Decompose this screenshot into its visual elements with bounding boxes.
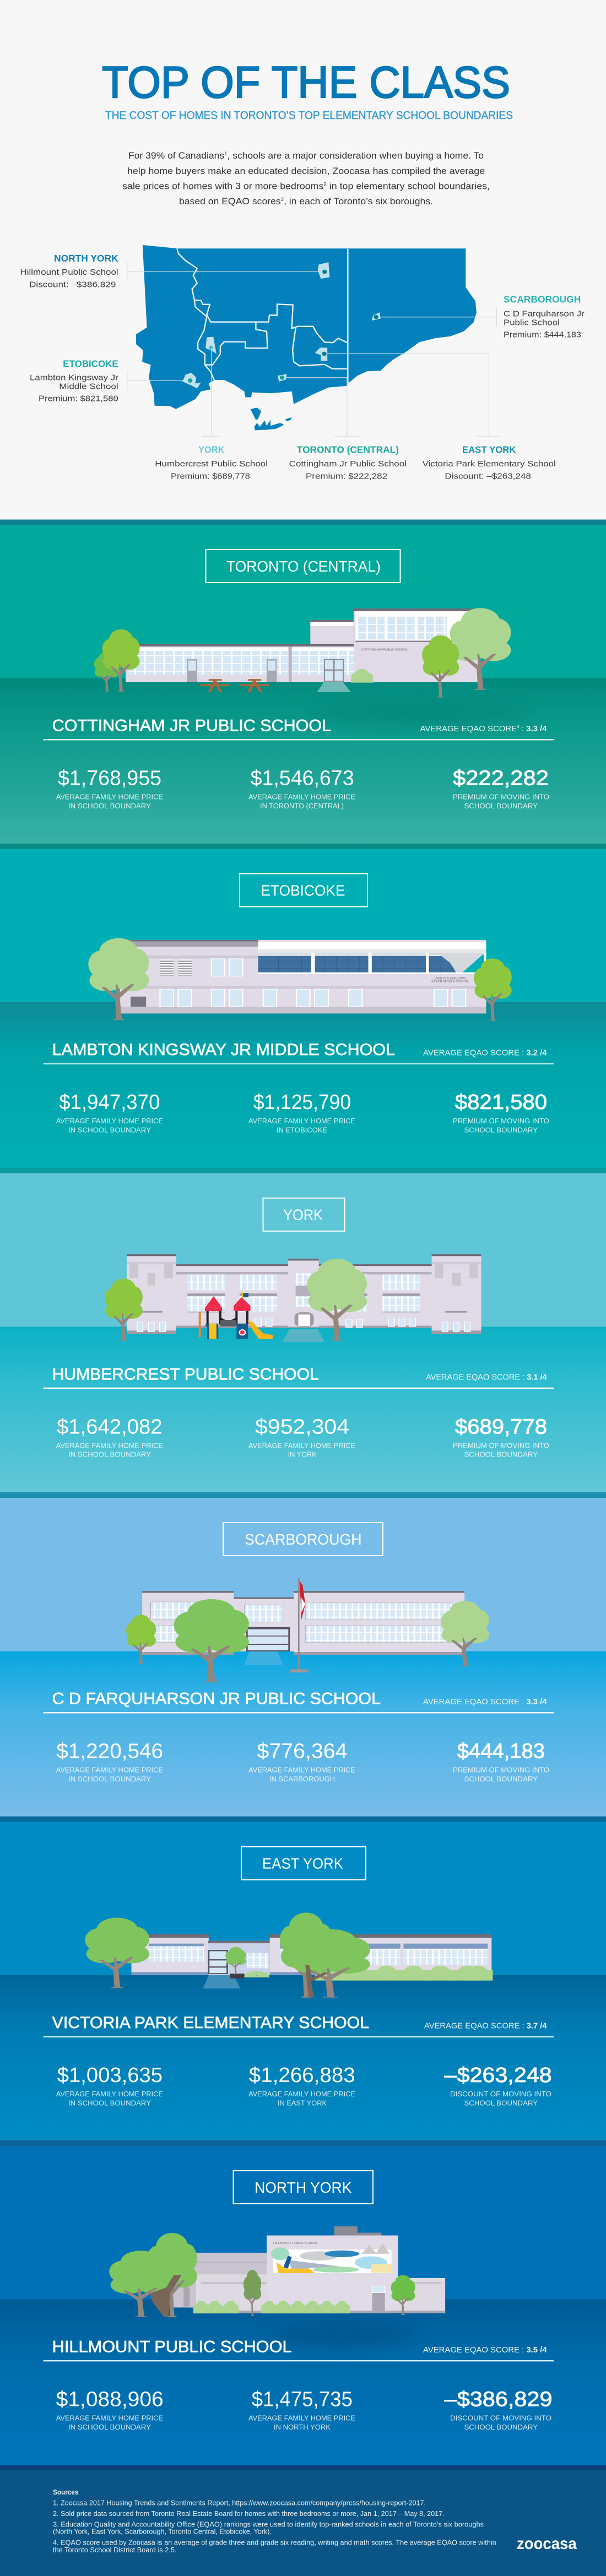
stat: price in school boundary: IN SCHOOL BOUNDARY [68,2423,151,2431]
sources: 1. Zoocasa 2017 Housing Trends and Sentiments Report, https://www.zoocasa.com/company/press/housing-report-2017. [53,2499,426,2507]
callout: Scarborough [504,294,585,339]
stat: price in borough [248,2388,355,2431]
school heading: HILLMOUNT PUBLIC SCHOOL [52,2338,292,2356]
borough label: SCARBOROUGH [245,1531,362,1548]
stat: premium: PREMIUM OF MOVING INTO [453,1766,549,1774]
sign: school name on building: LAMBTON KINGSWAY [434,977,467,980]
illustration: Hillmount school [109,2226,445,2317]
stat: price in school boundary [56,1091,163,1134]
intro text: help home buyers make an educated decision, Zoocasa has compiled the average [127,166,485,176]
stat: premium [453,767,549,810]
stat: price in school boundary [56,2388,164,2431]
stat: price in school boundary: AVERAGE FAMILY HOME PRICE [56,2090,163,2098]
stat: price in school boundary: IN SCHOOL BOUNDARY [68,2099,151,2107]
stat: price in school boundary: $1,642,082 [57,1415,163,1438]
borough label [263,1198,345,1231]
callout: Toronto Central: Cottingham Jr Public School [289,459,407,469]
callout: Scarborough: Public School [504,318,560,327]
stat: premium: SCHOOL BOUNDARY [464,1450,538,1459]
stat: price in school boundary [56,767,163,810]
stat: price in borough: $1,266,883 [249,2064,355,2087]
stat: price in borough: $952,304 [255,1415,349,1438]
stat: price in school boundary: AVERAGE FAMILY HOME PRICE [56,793,163,801]
panel: Etobicoke [0,844,606,1168]
map of Toronto boroughs [127,245,501,436]
stat: premium: $689,778 [455,1415,547,1438]
intro text: , schools are a major consideration when buying a home. To [227,151,484,161]
illustration: C D Farquharson school [126,1578,489,1682]
callout: North York: NORTH YORK [54,253,118,264]
callout: Toronto Central: TORONTO (CENTRAL) [297,444,399,455]
stat: price in borough: AVERAGE FAMILY HOME PRICE [248,1117,355,1125]
stat: discount: DISCOUNT OF MOVING INTO [450,2414,551,2422]
stat: price in borough: AVERAGE FAMILY HOME PRICE [248,1441,355,1449]
sign: school name on building [431,977,469,983]
illustration: Lambton Kingsway school [88,938,512,1020]
title: TOP OF THE CLASS [102,58,510,107]
stat: discount: –$386,829 [445,2388,552,2411]
sources: 2. Sold price data sourced from Toronto Real Estate Board for homes with three bedrooms or more, Jan 1, 2017 – May 8, 2017. [53,2510,445,2518]
school heading: VICTORIA PARK ELEMENTARY SCHOOL [52,2014,369,2032]
sign: school name on building: COTTINGHAM PUBLIC SCHOOL [361,649,408,652]
callout: Etobicoke [30,358,118,404]
borough label: YORK [283,1207,323,1224]
callout: Scarborough: SCARBOROUGH [504,294,581,305]
callout: North York: Hillmount Public School [20,268,118,277]
stat: price in borough: AVERAGE FAMILY HOME PRICE [248,2090,355,2098]
stat: price in borough: IN NORTH YORK [274,2423,331,2431]
school heading: LAMBTON KINGSWAY JR MIDDLE SCHOOL [52,1041,395,1059]
stat: price in school boundary: $1,768,955 [58,767,161,790]
sources: the Toronto School District Board is 2.5. [53,2546,177,2554]
EAQO score: : [520,725,526,733]
borough label: NORTH YORK [255,2179,352,2196]
stat: price in borough [248,1415,355,1459]
stat: price in school boundary: IN SCHOOL BOUNDARY [68,1126,151,1134]
subtitle: THE COST OF HOMES IN TORONTO’S TOP ELEMENTARY SCHOOL BOUNDARIES [105,110,513,122]
school boundary markers [182,262,381,388]
EAQO score: AVERAGE EQAO SCORE [420,725,514,733]
sign: school name on building: HILLMOUNT PUBLIC SCHOOL [273,2242,318,2245]
EAQO score: AVERAGE EQAO SCORE : 3.2 /4 [423,1048,547,1057]
EAQO score: AVERAGE EQAO SCORE : 3.7 /4 [424,2022,547,2031]
stat: discount: SCHOOL BOUNDARY [464,2423,538,2431]
intro text [122,151,490,206]
illustration: Victoria Park school [85,1912,493,1998]
intro text: , in each of Toronto’s six boroughs. [284,197,433,206]
panel: Toronto (Central) [0,520,606,844]
sources: (North York, East York, Scarborough, Toronto Central, Etobicoke, York). [53,2528,272,2536]
stat: price in borough [248,1091,355,1134]
illustration: Humbercrest school [105,1254,481,1342]
borough label: TORONTO (CENTRAL) [226,558,381,575]
sources: Sources [53,2488,78,2496]
callout: East York: EAST YORK [462,444,516,455]
stat: premium: PREMIUM OF MOVING INTO [453,1441,549,1449]
stat: price in school boundary: IN SCHOOL BOUNDARY [68,1775,151,1783]
EAQO score: 3.3 /4 [526,725,547,733]
stat: price in borough [248,1740,355,1783]
leader lines [127,262,501,436]
stat: price in borough: AVERAGE FAMILY HOME PRICE [248,793,355,801]
school heading: C D FARQUHARSON JR PUBLIC SCHOOL [52,1690,381,1708]
stat: price in school boundary: AVERAGE FAMILY HOME PRICE [56,1766,163,1774]
stat: price in school boundary: AVERAGE FAMILY HOME PRICE [56,2414,163,2422]
stat: price in school boundary: IN SCHOOL BOUNDARY [68,1450,151,1459]
callout: York [155,444,268,481]
intro text: 1 [224,151,227,156]
callout: Etobicoke: ETOBICOKE [63,358,118,369]
stat: price in borough: $1,546,673 [251,767,354,790]
intro text: 3 [281,197,284,202]
callout: North York: Discount: –$386,829 [29,280,116,289]
stat: price in school boundary: AVERAGE FAMILY HOME PRICE [56,1441,163,1449]
callout: Scarborough: Premium: $444,183 [504,330,581,339]
callout: Etobicoke: Premium: $821,580 [39,394,118,404]
callout: Toronto Central: Premium: $222,282 [306,471,387,481]
borough label [206,550,400,583]
EAQO score: AVERAGE EQAO SCORE : 3.3 /4 [423,1698,547,1707]
stat: price in borough: AVERAGE FAMILY HOME PRICE [248,1766,355,1774]
stat: premium: SCHOOL BOUNDARY [464,1126,538,1134]
stat: premium: $444,183 [457,1740,545,1763]
intro text: in top elementary school boundaries, [327,182,490,192]
EAQO score: AVERAGE EQAO SCORE : 3.5 /4 [423,2346,547,2355]
stat: premium: PREMIUM OF MOVING INTO [453,1117,549,1125]
borough label: ETOBICOKE [261,882,345,899]
intro text: For 39% of Canadians [128,151,219,161]
stat: price in borough [248,2064,355,2107]
stat: price in school boundary: $1,947,370 [59,1091,160,1114]
stat: price in borough [248,767,355,810]
logo: zoocasa: zoocasa [517,2535,577,2553]
school heading: HUMBERCREST PUBLIC SCHOOL [52,1365,319,1383]
borough label [234,2171,373,2204]
stat: price in borough: AVERAGE FAMILY HOME PRICE [248,2414,355,2422]
borough label: EAST YORK [262,1855,343,1872]
stat: premium: $821,580 [455,1091,547,1114]
callout: York: YORK [198,444,225,455]
stat: discount [445,2388,552,2431]
stat: price in borough: $1,475,735 [252,2388,353,2411]
stat: price in borough: IN YORK [288,1450,317,1459]
stat: price in school boundary: AVERAGE FAMILY HOME PRICE [56,1117,163,1125]
callout: Toronto Central [289,444,407,481]
stat: price in borough: IN EAST YORK [278,2099,327,2107]
EAQO score: AVERAGE EQAO SCORE : 3.1 /4 [426,1373,547,1382]
stat: price in borough: IN SCARBOROUGH [269,1775,335,1783]
stat: price in school boundary: $1,003,635 [57,2064,163,2087]
borough label [240,873,367,906]
stat: price in school boundary: IN SCHOOL BOUNDARY [68,802,151,810]
stat: price in borough: IN TORONTO (CENTRAL) [260,802,344,810]
stat: price in school boundary: $1,088,906 [56,2388,164,2411]
panel: Scarborough [0,1492,606,1817]
stat: price in school boundary: $1,220,546 [56,1740,163,1763]
callout: Etobicoke: Lambton Kingsway Jr [30,373,118,382]
illustration: playground [200,1292,273,1339]
panel: East York [0,1816,606,2141]
callout: York: Premium: $689,778 [171,471,250,481]
callout: East York [423,444,556,481]
illustration: Cottingham school [94,608,511,697]
sources: 4. EQAO score used by Zoocasa is an average of grade three and grade six reading, writing and math scores. The average EQAO score within [53,2539,496,2547]
stat: premium: $222,282 [453,767,549,790]
stat: discount: SCHOOL BOUNDARY [464,2099,538,2107]
stat: price in school boundary [56,1415,163,1459]
callout: East York: Discount: –$263,248 [445,471,531,481]
stat: premium: PREMIUM OF MOVING INTO [453,793,549,801]
sign: school name on building: JUNIOR MIDDLE SCHOOL [431,980,469,983]
stat: premium: SCHOOL BOUNDARY [464,1775,538,1783]
stat: price in school boundary [56,2064,163,2107]
stat: premium [453,1091,549,1134]
stat: discount [445,2064,552,2107]
callout: Scarborough: C D Farquharson Jr [504,309,585,318]
intro text: 2 [323,182,327,187]
stat: premium: SCHOOL BOUNDARY [464,802,538,810]
callout: North York [20,253,118,289]
callout: East York: Victoria Park Elementary School [423,459,556,469]
borough label [223,1523,383,1556]
panel: North York [0,2140,606,2465]
EAQO score [420,724,547,733]
sources: 3. Education Quality and Accountability Office (EQAO) rankings were used to identify top-ranked schools in each of Toronto’s six boroughs [53,2520,484,2528]
stat: premium [453,1740,549,1783]
stat: discount: –$263,248 [445,2064,552,2087]
stat: premium [453,1415,549,1459]
illustration: mural [271,2243,392,2273]
intro text: sale prices of homes with 3 or more bedrooms [122,182,309,192]
panel: York [0,1168,606,1492]
school heading: COTTINGHAM JR PUBLIC SCHOOL [52,717,331,735]
callout: Etobicoke: Middle School [59,382,118,391]
intro text: based on EQAO scores [179,197,274,206]
stat: discount: DISCOUNT OF MOVING INTO [450,2090,551,2098]
callout: York: Humbercrest Public School [155,459,268,469]
stat: price in borough: $776,364 [257,1740,347,1763]
stat: price in borough: IN ETOBICOKE [277,1126,327,1134]
stat: price in school boundary [56,1740,163,1783]
sources [53,2488,496,2554]
footer panel [0,2465,606,2576]
borough label [241,1847,366,1880]
stat: price in borough: $1,125,790 [253,1091,351,1114]
EAQO score: 4 [517,724,520,729]
